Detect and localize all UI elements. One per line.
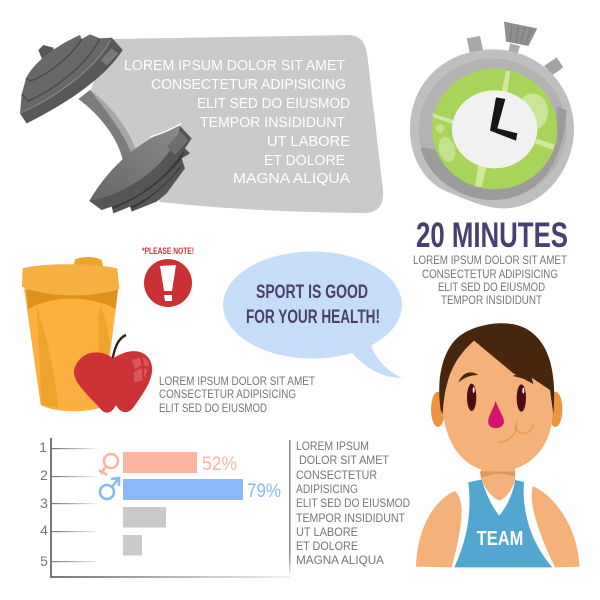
text block: chart description: DOLOR SIT AMET bbox=[299, 455, 389, 467]
character: athlete: TEAM bbox=[477, 527, 523, 550]
bar chart: 79% bbox=[247, 481, 281, 502]
panel text: dumbbell description bbox=[124, 58, 350, 187]
bar chart: 52% bbox=[202, 454, 237, 475]
text block: stopwatch description: CONSECTETUR ADIPISICING bbox=[422, 269, 558, 281]
bar chart bbox=[39, 438, 290, 578]
text block: cup description: ELIT SED DO EIUSMOD bbox=[159, 403, 267, 415]
text block: chart description: TEMPOR INSIDIDUNT bbox=[296, 513, 405, 525]
icon: dumbbell bbox=[20, 34, 192, 213]
clock hands bbox=[490, 97, 517, 141]
text block: chart description: MAGNA ALIQUA bbox=[296, 555, 384, 567]
text block: chart description: ET DOLORE bbox=[296, 541, 358, 553]
bar chart: 5 bbox=[40, 553, 48, 569]
note label: *PLEASE NOTE! bbox=[142, 246, 194, 257]
text block: chart description bbox=[296, 441, 410, 567]
icon: male symbol bbox=[100, 478, 119, 499]
text block: cup description: CONSECTETUR ADIPISICING bbox=[159, 389, 296, 401]
text block: chart description: LOREM IPSUM bbox=[296, 441, 369, 453]
panel text: dumbbell description: UT LABORE bbox=[267, 134, 350, 150]
panel: lorem text backdrop bbox=[90, 35, 383, 213]
text block: cup description bbox=[159, 376, 315, 415]
icon: female symbol bbox=[99, 454, 118, 475]
speech bubble bbox=[223, 252, 402, 378]
speech bubble: FOR YOUR HEALTH! bbox=[246, 307, 380, 328]
character: athlete bbox=[416, 323, 579, 567]
panel text: dumbbell description: CONSECTETUR ADIPISICING bbox=[151, 77, 346, 93]
bar chart: 3 bbox=[40, 495, 48, 511]
bar chart: 2 bbox=[40, 467, 48, 483]
icon: exclamation badge bbox=[144, 259, 192, 307]
bar chart: 1 bbox=[39, 439, 47, 455]
text block: stopwatch description bbox=[413, 255, 567, 307]
text block: chart description: ADIPISICING bbox=[296, 484, 358, 496]
panel text: dumbbell description: ELIT SED DO EIUSMOD bbox=[197, 96, 350, 112]
speech bubble: SPORT IS GOOD bbox=[256, 282, 368, 303]
text block: chart description: UT LABORE bbox=[296, 527, 358, 539]
text block: stopwatch description: ELIT SED DO EIUSMOD bbox=[438, 282, 545, 294]
panel text: dumbbell description: TEMPOR INSIDIDUNT bbox=[200, 115, 345, 131]
text block: chart description: CONSECTETUR bbox=[296, 470, 377, 482]
panel text: dumbbell description: MAGNA ALIQUA bbox=[233, 171, 350, 187]
panel text: dumbbell description: ET DOLORE bbox=[264, 153, 345, 169]
text block: stopwatch description: LOREM IPSUM DOLOR SIT AMET bbox=[413, 255, 567, 267]
icon: shaker cup bbox=[22, 257, 119, 411]
icon: apple bbox=[74, 335, 152, 413]
panel text: dumbbell description: LOREM IPSUM DOLOR SIT AMET bbox=[124, 58, 345, 74]
text block: chart description: ELIT SED DO EIUSMOD bbox=[296, 498, 410, 510]
icon: stopwatch bbox=[410, 22, 574, 208]
text block: stopwatch description: TEMPOR INSIDIDUNT bbox=[441, 295, 542, 307]
bar chart: 4 bbox=[40, 522, 48, 538]
text block: cup description: LOREM IPSUM DOLOR SIT AMET bbox=[159, 376, 315, 388]
